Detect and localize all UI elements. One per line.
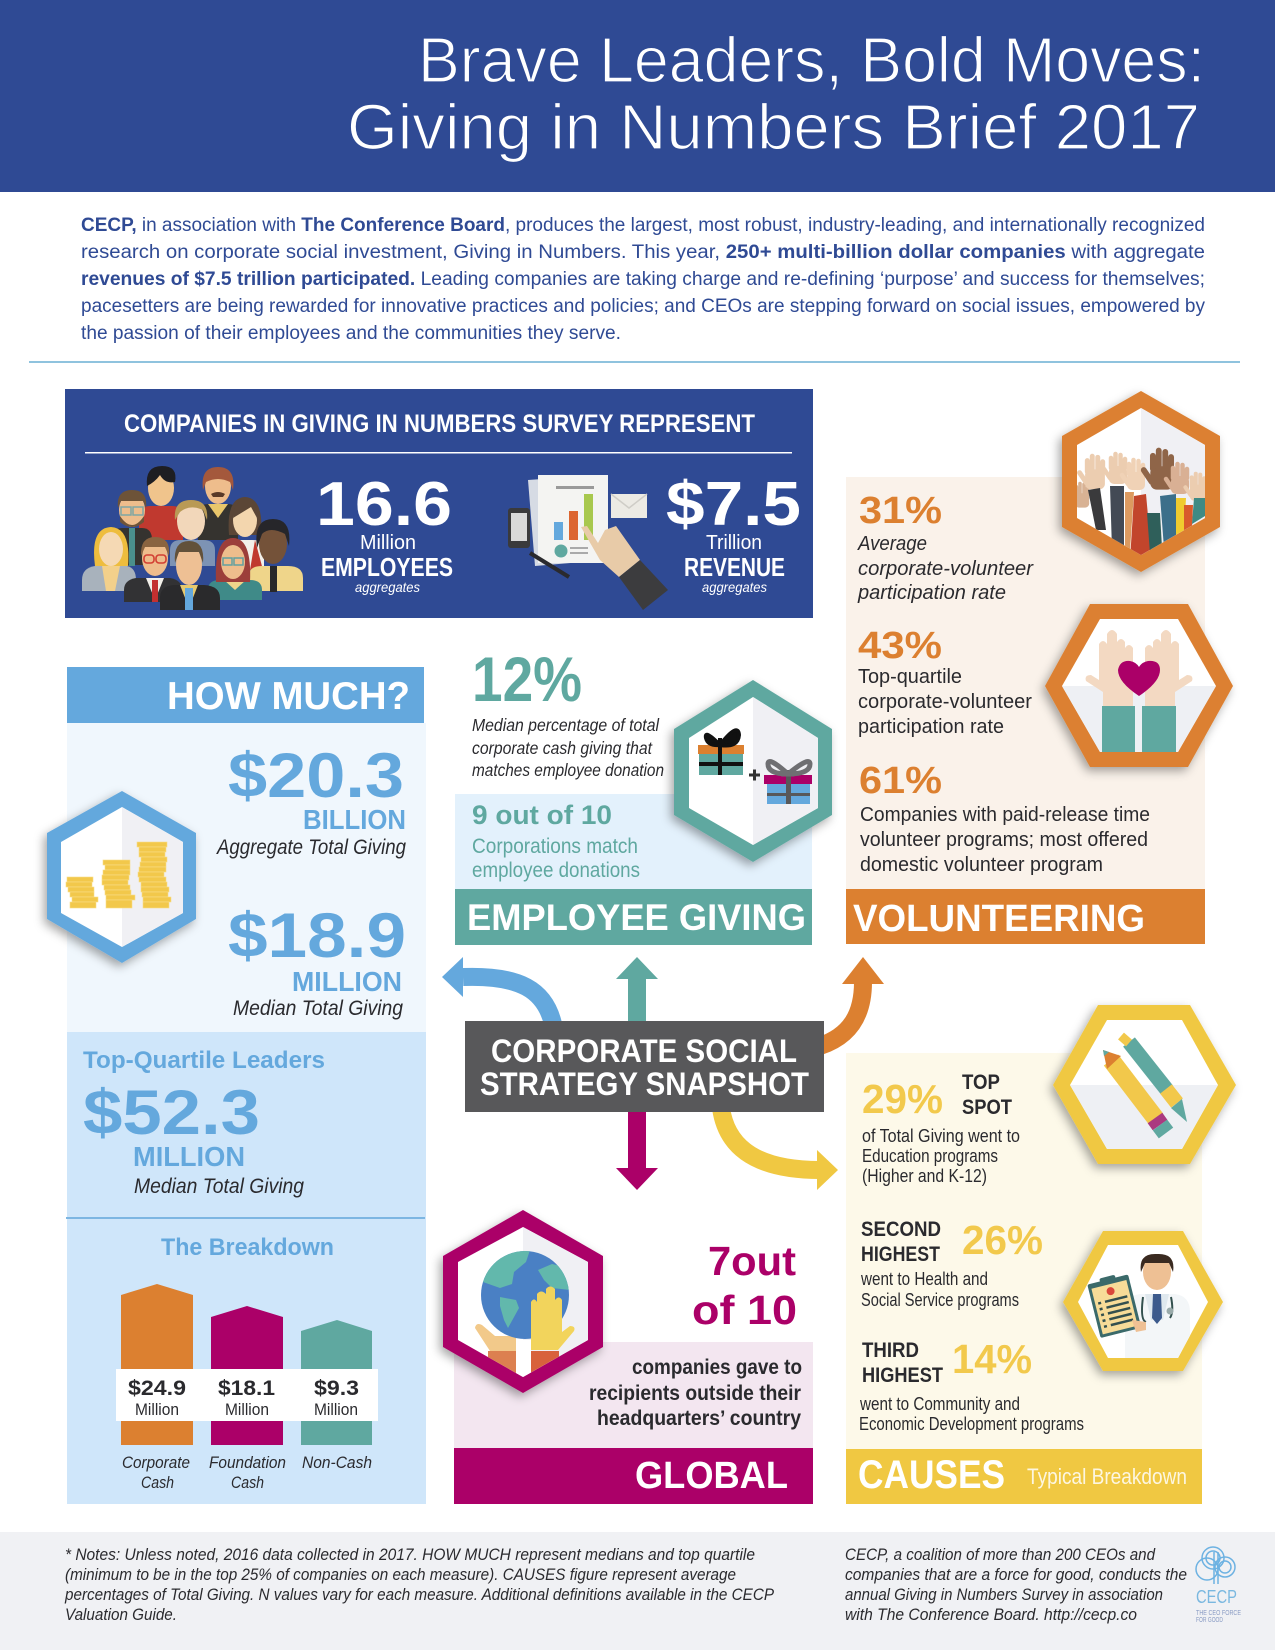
intro paragraph	[81, 215, 1205, 344]
icon: raised hands hexagon	[1062, 391, 1220, 572]
intro paragraph: the passion of their employees and the communities they serve.	[81, 323, 621, 344]
stat: 7 out of 10: 7out	[708, 1238, 796, 1284]
icon: pencil and pen hexagon	[1053, 1005, 1236, 1164]
panel: causes	[846, 1005, 1236, 1504]
stat: 43 percent	[858, 625, 1032, 738]
bar chart: breakdown: Million	[135, 1400, 179, 1419]
footnotes: percentages of Total Giving. N values vary for each measure. Additional definitions available in the CECP	[64, 1585, 775, 1604]
footnotes	[64, 1545, 775, 1624]
stat: revenue	[666, 470, 801, 595]
stat: median total giving: $18.9	[228, 901, 406, 971]
stat: 29 percent top spot: SPOT	[962, 1096, 1012, 1119]
global description: companies gave to	[632, 1356, 802, 1379]
bar chart: breakdown: Cash	[141, 1473, 174, 1492]
stat: 26 percent second highest: went to Health and	[860, 1269, 988, 1289]
icon: report and hand	[508, 475, 668, 610]
intro paragraph: CECP, in association with The Conference Board, produces the largest, most robust, industry-leading, and internationally recognized	[81, 215, 1205, 236]
bar chart: breakdown: $24.9	[128, 1377, 186, 1400]
stat: 14 percent third highest: THIRD	[862, 1339, 919, 1362]
stat: 26 percent second highest: 26%	[962, 1217, 1043, 1263]
stat: 12 percent	[472, 645, 664, 780]
breakdown heading: The Breakdown	[161, 1234, 334, 1261]
stat: revenue: aggregates	[702, 579, 767, 595]
icon: doctor hexagon	[1063, 1231, 1223, 1371]
stat: 61 percent: domestic volunteer program	[860, 854, 1103, 876]
bar chart: breakdown: $18.1	[218, 1377, 275, 1400]
causes heading	[858, 1453, 1187, 1497]
stat: top-quartile leaders: Median Total Giving	[134, 1175, 304, 1198]
intro paragraph: pacesetters are being rewarded for innovative practices and policies; and CEOs are stepping forward on social issues, empowered by	[81, 296, 1205, 317]
title	[347, 24, 1205, 163]
global description	[589, 1356, 802, 1430]
stat: aggregate total giving: $20.3	[228, 741, 404, 811]
logo: CECP	[1196, 1547, 1241, 1624]
bar chart: breakdown: Non-Cash	[302, 1453, 372, 1472]
central box: corporate social strategy snapshot: CORPORATE SOCIAL	[491, 1033, 797, 1069]
stat: aggregate total giving: BILLION	[303, 804, 406, 835]
footnotes: (minimum to be in the top 25% of companies on each measure). CAUSES figure represent average	[65, 1565, 736, 1584]
logo: CECP: CECP	[1196, 1587, 1237, 1607]
stat: 9 out of 10: 9 out of 10	[472, 800, 612, 830]
title: Giving in Numbers Brief 2017	[347, 91, 1200, 163]
icon: coins hexagon	[47, 791, 196, 963]
stat: 31 percent: participation rate	[857, 582, 1006, 604]
stat: 61 percent	[859, 760, 1150, 876]
stat: top-quartile leaders: Top-Quartile Leaders	[83, 1047, 325, 1074]
stat: 29 percent top spot: Education programs	[862, 1146, 998, 1166]
bar chart: breakdown	[116, 1284, 378, 1492]
arrow: to causes	[721, 1108, 838, 1190]
stat: 7 out of 10: of 10	[692, 1287, 797, 1333]
survey heading: COMPANIES IN GIVING IN NUMBERS SURVEY REPRESENT	[124, 410, 755, 438]
bar chart: breakdown: Cash	[231, 1473, 264, 1492]
stat: 43 percent: Top-quartile	[858, 666, 962, 688]
stat: 61 percent: Companies with paid-release time	[860, 804, 1150, 826]
bar chart: breakdown: $9.3	[314, 1377, 359, 1400]
stat: 31 percent: corporate-volunteer	[858, 558, 1034, 580]
central box: corporate social strategy snapshot: STRATEGY SNAPSHOT	[480, 1066, 809, 1102]
global description: headquarters’ country	[597, 1407, 801, 1430]
stat: median total giving: Median Total Giving	[233, 997, 403, 1020]
panel: survey representation	[65, 389, 813, 618]
stat: 29 percent top spot: 29%	[862, 1076, 943, 1122]
stat: 14 percent third highest	[859, 1336, 1084, 1434]
stat: 43 percent: participation rate	[858, 716, 1004, 738]
intro paragraph: research on corporate social investment, Giving in Numbers. This year, 250+ multi-billion dollar companies with aggregate	[81, 242, 1205, 263]
stat: 12 percent: corporate cash giving that	[472, 738, 653, 758]
about CECP: annual Giving in Numbers Survey in association	[845, 1585, 1163, 1604]
footer	[0, 1532, 1275, 1650]
stat: 61 percent: 61%	[859, 760, 942, 802]
stat: median total giving: MILLION	[292, 966, 402, 997]
title: Brave Leaders, Bold Moves:	[418, 24, 1205, 96]
stat: median total giving	[228, 901, 406, 1020]
central box: corporate social strategy snapshot	[465, 1021, 824, 1112]
panel: volunteering	[846, 391, 1233, 944]
stat: 12 percent: matches employee donation	[472, 760, 664, 780]
stat: 43 percent: corporate-volunteer	[858, 691, 1032, 713]
bar chart: breakdown: Corporate	[122, 1453, 190, 1472]
logo: CECP: FOR GOOD	[1196, 1615, 1223, 1624]
panel: employee giving	[455, 645, 832, 945]
about CECP: with The Conference Board. http://cecp.co	[845, 1605, 1137, 1624]
intro paragraph: revenues of $7.5 trillion participated. Leading companies are taking charge and re-defining ‘purpose’ and success for themselves;	[81, 269, 1205, 290]
stat: 14 percent third highest: HIGHEST	[862, 1364, 943, 1387]
stat: 61 percent: volunteer programs; most offered	[860, 829, 1148, 851]
stat: 9 out of 10: Corporations match	[472, 835, 638, 858]
icon: gifts hexagon	[674, 680, 832, 862]
stat: 31 percent	[857, 490, 1034, 604]
stat: 29 percent top spot: (Higher and K-12)	[862, 1166, 987, 1186]
icon: globe hexagon	[443, 1210, 603, 1393]
stat: 14 percent third highest: 14%	[952, 1336, 1032, 1382]
icon: hands with heart hexagon	[1045, 604, 1233, 767]
panel: how much	[47, 667, 426, 1504]
stat: aggregate total giving: Aggregate Total Giving	[215, 836, 406, 859]
stat: employees: 16.6	[316, 470, 452, 539]
global description: recipients outside their	[589, 1382, 801, 1405]
icon: group of employees	[82, 466, 303, 610]
bar chart: breakdown: Million	[314, 1400, 358, 1419]
arrow: to how much	[442, 957, 553, 1024]
stat: 26 percent second highest: HIGHEST	[861, 1243, 940, 1266]
stat: 26 percent second highest	[860, 1217, 1043, 1310]
stat: top-quartile leaders: MILLION	[133, 1141, 245, 1172]
causes heading: CAUSES	[858, 1453, 1005, 1497]
stat: 9 out of 10: employee donations	[472, 859, 640, 882]
stat: employees: EMPLOYEES	[321, 552, 453, 582]
stat: 29 percent top spot	[862, 1071, 1020, 1186]
bar chart: breakdown: Million	[225, 1400, 269, 1419]
stat: employees: aggregates	[355, 579, 420, 595]
stat: 26 percent second highest: Social Service programs	[861, 1290, 1019, 1310]
arrow: to employee giving	[616, 957, 658, 1022]
stat: employees	[316, 470, 453, 595]
header banner	[0, 0, 1275, 192]
about CECP: CECP, a coalition of more than 200 CEOs and	[845, 1545, 1155, 1564]
stat: aggregate total giving	[215, 741, 406, 859]
stat: revenue: Trillion	[706, 532, 762, 554]
footnotes: Valuation Guide.	[65, 1605, 177, 1624]
stat: 43 percent: 43%	[858, 625, 942, 667]
how much heading: HOW MUCH?	[167, 675, 410, 718]
stat: revenue: REVENUE	[684, 552, 785, 582]
arrow: to global	[616, 1110, 658, 1190]
employee giving heading: EMPLOYEE GIVING	[467, 897, 806, 938]
footnotes: * Notes: Unless noted, 2016 data collected in 2017. HOW MUCH represent medians and top quartile	[65, 1545, 755, 1564]
stat: 14 percent third highest: went to Community and	[859, 1394, 1020, 1414]
about CECP: companies that are a force for good, conducts the	[845, 1565, 1187, 1584]
stat: revenue: $7.5	[666, 470, 801, 539]
logo: CECP: THE CEO FORCE	[1196, 1608, 1241, 1617]
causes heading: Typical Breakdown	[1027, 1464, 1187, 1489]
stat: 7 out of 10	[692, 1238, 797, 1333]
stat: top-quartile leaders: $52.3	[83, 1078, 260, 1148]
stat: 26 percent second highest: SECOND	[861, 1218, 941, 1241]
global heading: GLOBAL	[635, 1455, 788, 1497]
stat: 31 percent: 31%	[859, 490, 942, 532]
stat: employees: Million	[360, 532, 416, 554]
bar chart: breakdown: Foundation	[209, 1453, 286, 1472]
arrow: to volunteering	[820, 957, 884, 1046]
stat: top-quartile leaders	[83, 1047, 325, 1198]
about CECP	[845, 1545, 1187, 1624]
stat: 29 percent top spot: TOP	[962, 1071, 1000, 1094]
stat: 12 percent: Median percentage of total	[472, 715, 660, 735]
stat: 29 percent top spot: of Total Giving went to	[862, 1126, 1020, 1146]
panel: global	[443, 1210, 813, 1504]
stat: 12 percent: 12%	[472, 645, 582, 715]
volunteering heading: VOLUNTEERING	[853, 898, 1145, 940]
stat: 9 out of 10	[472, 800, 640, 882]
stat: 14 percent third highest: Economic Development programs	[859, 1414, 1084, 1434]
stat: 31 percent: Average	[857, 533, 927, 555]
